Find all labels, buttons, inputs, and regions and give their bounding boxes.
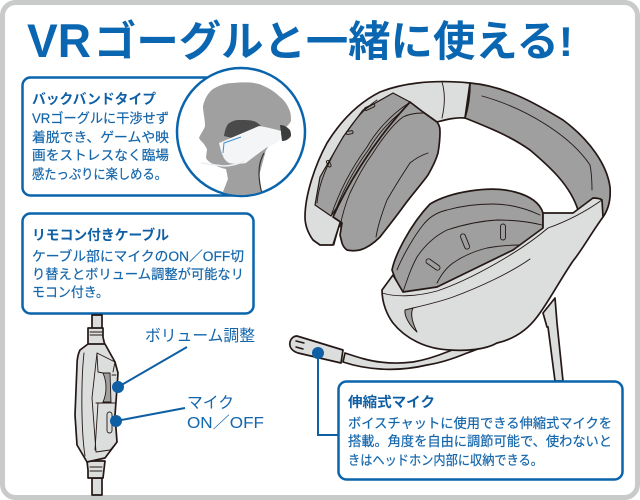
- title: VR: [27, 14, 91, 67]
- text: telescopic mic description: きはヘッドホン内部に収納できる。: [348, 453, 543, 468]
- callout: telescopic mic: [312, 347, 622, 480]
- text: remote cable description: モコン付き。: [32, 285, 109, 300]
- callout: volume control: [112, 327, 255, 393]
- vent on shell: [405, 308, 417, 332]
- panel: remote cable: [22, 214, 254, 314]
- left housing: [315, 93, 410, 216]
- headset band: [224, 120, 261, 138]
- headband: [305, 82, 470, 245]
- headband padding: [465, 83, 610, 217]
- text: remote cable description: ケーブル部にマイクのON／OFF切: [32, 248, 244, 264]
- panel: back band type: [22, 78, 242, 196]
- illustration: head wearing headset: [177, 68, 305, 200]
- text: back band description: VRゴーグルに干渉せず: [32, 110, 169, 126]
- text: telescopic mic description: ボイスチャットに使用できる伸縮式マイクを: [348, 415, 612, 431]
- head silhouette: [199, 82, 291, 200]
- illustration: headphones: [290, 82, 610, 381]
- headset cup: [219, 126, 281, 164]
- illustration: cable remote: [75, 315, 118, 495]
- text: telescopic mic description: 搭載。角度を自由に調節可能で、使わないと: [348, 433, 612, 449]
- text: back band description: 感たっぷりに楽しめる。: [32, 166, 167, 182]
- microphone boom: [343, 335, 493, 369]
- microphone head: [290, 336, 343, 363]
- callout: mic on off: [110, 394, 264, 432]
- heading: remote cable: リモコン付きケーブル: [32, 227, 169, 243]
- text: back band description: 着脱でき、ゲームや映: [32, 129, 170, 145]
- heading: telescopic mic: 伸縮式マイク: [348, 394, 435, 410]
- text: back band description: 画をストレスなく臨場: [32, 148, 169, 163]
- callout: mic on off: マイク: [187, 394, 234, 412]
- headset mic: [201, 161, 244, 166]
- neck: [223, 150, 266, 195]
- right ear pad: [392, 189, 543, 294]
- callout: mic on off: ON／OFF: [187, 415, 264, 432]
- left ear pad: [333, 102, 440, 251]
- text: back band description: [32, 110, 170, 182]
- callout: volume control: ボリューム調整: [145, 327, 255, 345]
- headset cable: [259, 153, 264, 194]
- heading: back band type: バックバンドタイプ: [32, 91, 156, 107]
- text: remote cable description: [32, 248, 244, 300]
- text: remote cable description: り替えとボリューム調整が可能なリ: [32, 267, 244, 282]
- text: telescopic mic description: [348, 415, 612, 468]
- title: ゴーグルと一緒に使える!: [94, 18, 573, 65]
- cable: [543, 298, 563, 381]
- right ear cup shell: [382, 198, 603, 350]
